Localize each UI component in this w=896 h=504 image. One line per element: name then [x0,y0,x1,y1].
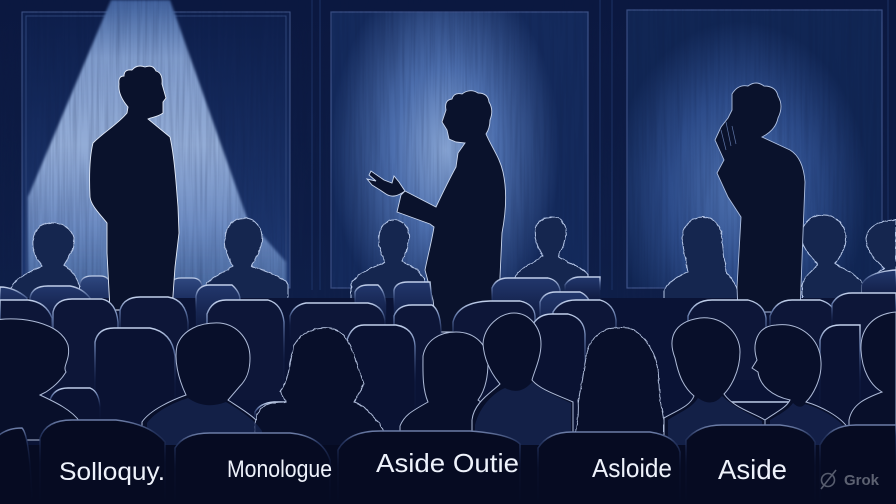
watermark text: Grok [844,472,880,489]
audience: second row seats [0,270,896,340]
figure: man in spotlight, soliloquy [90,66,179,310]
audience: fourth row seats [50,314,860,430]
wall pillar lines [312,0,888,290]
back row spectator 7 [862,220,896,300]
back row spectator 4 [515,217,588,300]
icon: Grok mark [821,470,836,489]
panel: third stage with dim glow [627,10,882,288]
label: Monologue: Monologue [227,456,332,483]
panel: first stage with spotlight [22,0,290,290]
back row spectator 5 [664,217,738,300]
audience: back row heads and shoulders [8,215,896,300]
audience: dark floor area [0,298,896,504]
audience: front row spectators [0,312,896,448]
figure: gesturing man, monologue [367,91,506,332]
front row spectator 9 [849,312,896,448]
back row spectator 6 [801,215,864,300]
label: Aside Outie: Aside Outie [376,448,519,478]
front row spectator 4 [400,332,510,446]
spotlight beam [28,0,286,290]
back row spectator 1 [8,223,80,300]
audience: front row seat backs [0,420,896,504]
figure: man whispering, aside [715,83,805,312]
label: Asloide: Asloide [592,453,672,483]
audience: third row seats [0,293,896,400]
front row spectator 3, long hair [255,328,384,446]
front row spectator 6, long hair [572,328,664,448]
front row shirt shading [147,382,845,445]
back row spectator 3 [351,220,424,300]
front row spectator 8, profile [752,325,848,448]
audience: back row seats [80,276,840,300]
front row spectator 5 [472,313,573,446]
label: Soliloquy: Solloquy. [59,458,165,486]
panel: second stage with soft glow [331,12,588,288]
back row spectator 2 [203,218,288,300]
front row spectator 2 [142,323,266,446]
label: Aside: Aside [718,454,787,485]
watermark: Grok logo [821,470,880,489]
front row spectator 1 [0,319,80,440]
whispering hand fingers [721,122,736,150]
front row spectator 7 [664,318,765,448]
curtain streak texture [0,0,896,300]
